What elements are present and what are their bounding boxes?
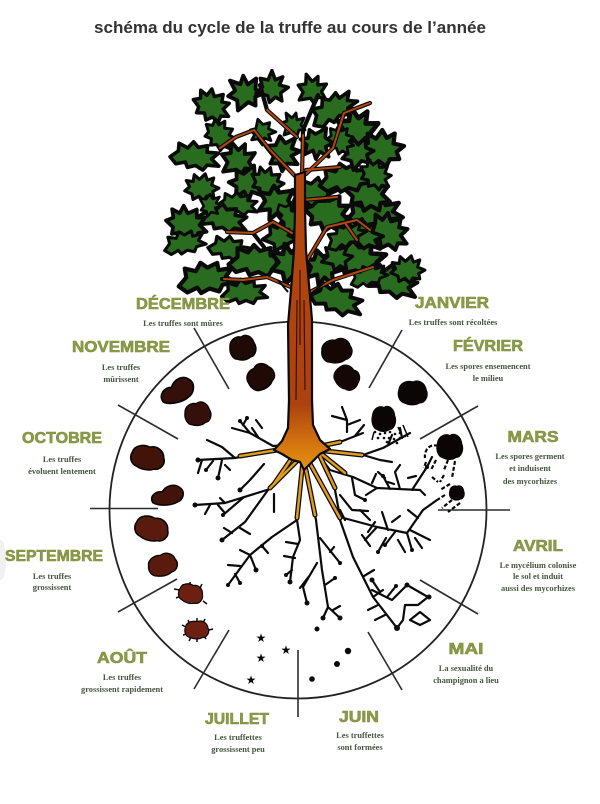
label: mars: et induisent	[509, 464, 551, 473]
stars july: ★	[256, 631, 266, 645]
label: avril: AVRIL	[513, 538, 563, 555]
label: juillet	[205, 711, 270, 754]
label: octobre: OCTOBRE	[22, 430, 102, 447]
stars july: ★	[281, 643, 291, 657]
label: février	[446, 338, 531, 383]
truffles october	[129, 443, 184, 508]
label: avril: le sol et induit	[513, 572, 563, 581]
truffles september	[132, 513, 180, 579]
label: janvier: Les truffes sont récoltées	[409, 318, 498, 327]
label: octobre: Les truffes	[43, 455, 82, 464]
label: octobre: évoluent lentement	[28, 467, 96, 476]
truffles february with spores	[372, 381, 427, 444]
label: juillet: JUILLET	[205, 711, 270, 728]
label: avril: Le mycélium colonise	[500, 561, 577, 570]
stars july	[246, 631, 291, 687]
stars july: ★	[256, 651, 266, 665]
label: mai: MAI	[448, 641, 484, 658]
label: septembre: Les truffes	[33, 572, 72, 581]
label: janvier: JANVIER	[415, 295, 489, 312]
title: schéma du cycle de la truffe au cours de l’année	[94, 18, 486, 37]
label: août	[81, 649, 163, 694]
tree canopy leaves	[161, 68, 427, 320]
label: juillet: Les truffettes	[214, 733, 263, 742]
label: février: le milieu	[473, 374, 504, 383]
label: novembre	[72, 339, 170, 384]
truffles march with hyphae	[424, 434, 465, 512]
label: juillet: grossissent peu	[211, 745, 265, 754]
label: février: Les spores ensemencent	[446, 362, 531, 371]
label: septembre: grossissent	[33, 583, 71, 592]
label: juin	[336, 709, 385, 752]
label: mars: des mycorhizes	[503, 477, 558, 486]
truffles november	[161, 378, 213, 427]
label: janvier	[409, 295, 498, 327]
label: février: FÉVRIER	[453, 338, 523, 355]
label: mai: La sexualité du	[439, 664, 494, 673]
label: novembre: NOVEMBRE	[72, 339, 170, 356]
label: août: AOÛT	[97, 649, 148, 667]
label: décembre: DÉCEMBRE	[136, 296, 230, 313]
label: décembre	[136, 296, 230, 328]
label: septembre: SEPTEMBRE	[5, 548, 103, 565]
label: novembre: Les truffes	[102, 363, 141, 372]
month dividers	[90, 328, 510, 717]
tree branches	[220, 85, 375, 293]
label: mars: MARS	[508, 429, 558, 446]
label: mars	[495, 429, 565, 486]
roots	[192, 407, 437, 631]
truffles december	[228, 334, 279, 395]
label: août: Les truffes	[103, 673, 142, 682]
label: novembre: mûrissent	[103, 375, 139, 384]
label: octobre	[22, 430, 102, 476]
tree	[161, 68, 437, 631]
label: août: grossissent rapidement	[81, 685, 163, 694]
label: décembre: Les truffes sont mûres	[143, 319, 224, 328]
label: septembre	[5, 548, 103, 592]
label: mars: Les spores germent	[495, 452, 565, 461]
dots june	[309, 626, 351, 682]
label: avril	[500, 538, 577, 593]
label: mai: champignon a lieu	[433, 676, 499, 685]
label: juin: JUIN	[339, 709, 379, 726]
spiky truffles august	[174, 581, 213, 642]
label: juin: Les truffettes	[336, 731, 385, 740]
trunk	[274, 172, 330, 470]
stars july: ★	[246, 673, 256, 687]
label: juin: sont formées	[337, 743, 383, 752]
smudge near left edge	[0, 540, 6, 580]
label: mai	[433, 641, 499, 685]
cycle circle	[110, 322, 486, 698]
truffles january	[320, 337, 364, 395]
label: avril: aussi des mycorhizes	[501, 584, 576, 593]
